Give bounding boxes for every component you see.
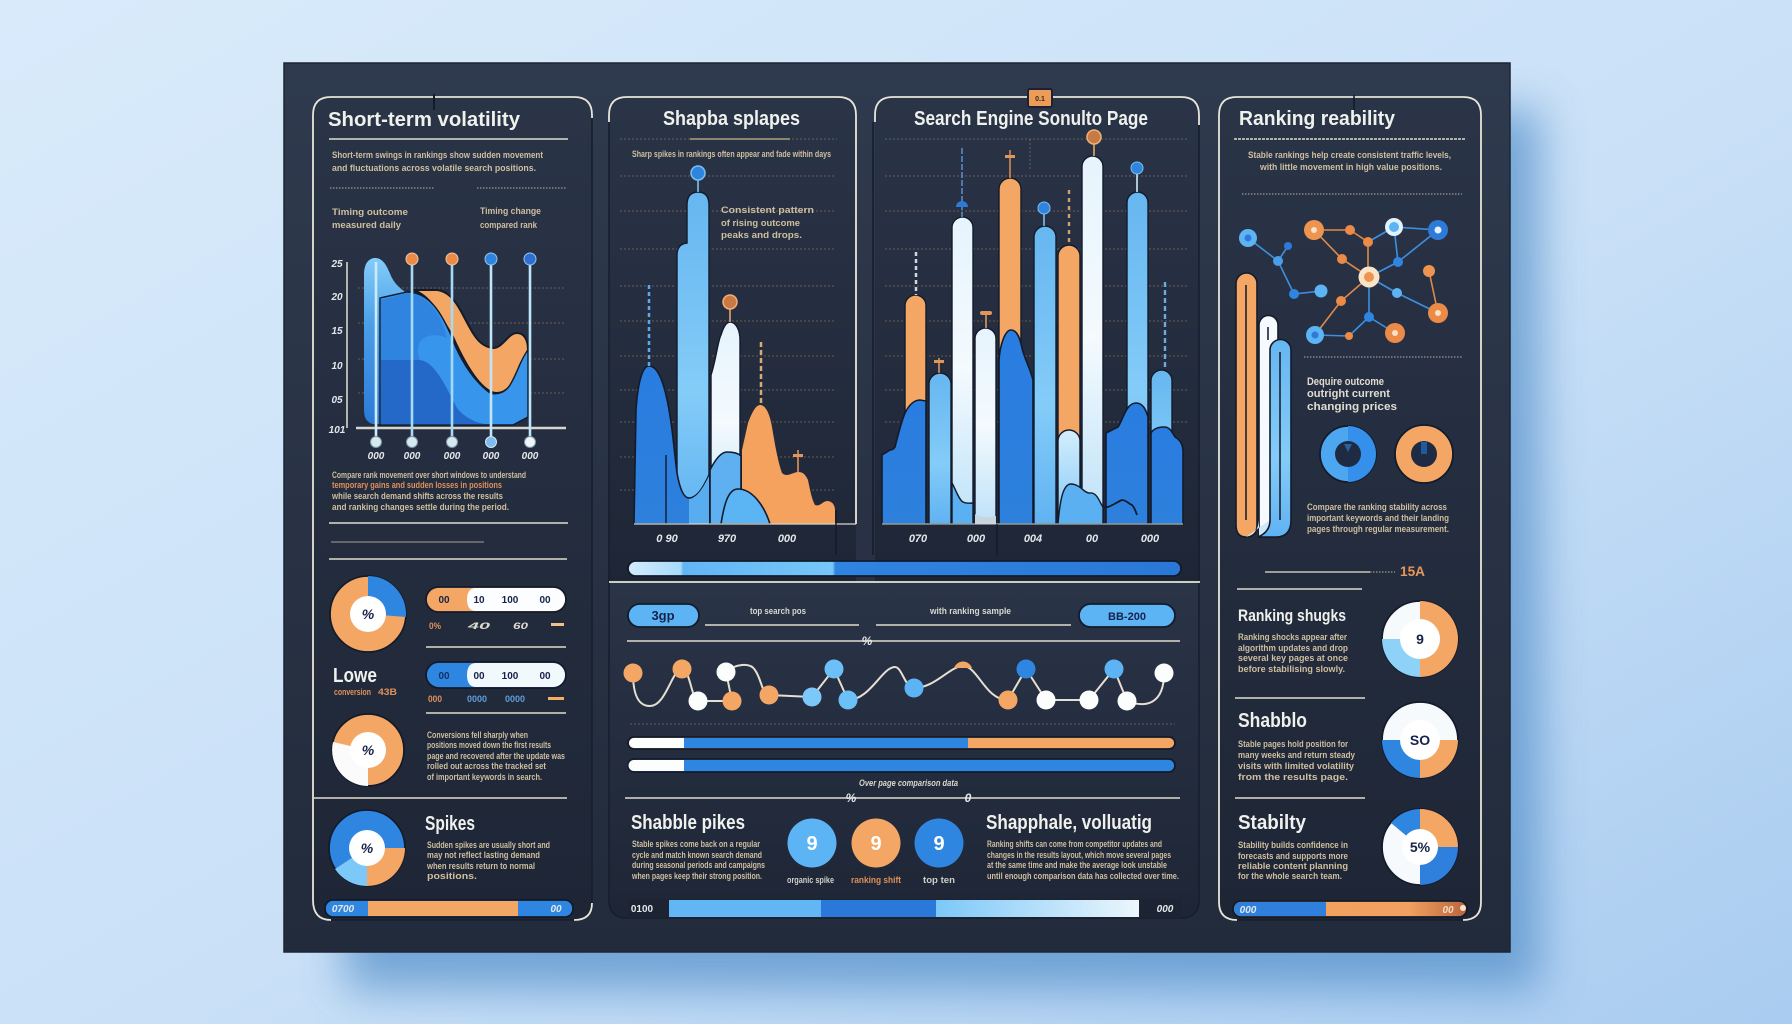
panel: short-term volatility [313,94,592,920]
stat marker: 15A [1400,563,1425,579]
spike chart: 000 [778,533,797,545]
donut: orange and blue: % [362,606,375,622]
label: Lowe: 43B [378,687,398,697]
dashboard board [284,63,1510,952]
number circles: 9 [933,833,945,855]
label: Lowe: Lowe [333,665,377,687]
area chart: 15 [331,326,343,337]
panel frame [609,97,856,590]
text: reliable content planning [1238,861,1348,872]
footer bar: 00 [1442,905,1454,916]
heading: Shabblo: Shabblo [1238,710,1307,732]
note text: Dequire outcome [1307,376,1384,388]
area chart: 000 [483,451,500,462]
node line chart [624,660,1174,710]
area chart: 000 [522,451,539,462]
footer bar [1233,901,1467,917]
area chart: 05 [331,395,343,406]
description text [1307,502,1449,535]
panel: sharp spikes chart [609,97,856,590]
number circles: top ten [923,875,955,886]
number circles: ranking shift [851,875,901,885]
text: Stable pages hold position for [1238,739,1348,750]
text left: during seasonal periods and campaigns [632,860,765,871]
top tab [1028,89,1052,107]
text right: at the same time and make the average look unstable [987,860,1167,871]
pill scale: blue: 00 [539,671,551,682]
horizontal gradient bar [628,561,1181,576]
text block: positions moved down the first results [427,740,551,751]
number circles: 9 [870,833,882,855]
text: many weeks and return steady [1238,750,1356,761]
pill scale: orange [426,587,566,632]
text block: rolled out across the tracked set [427,761,547,772]
panel: ranking stability [1219,95,1481,920]
network diagram [1239,218,1448,344]
area chart: 20 [330,292,343,303]
grid lines [620,176,835,490]
spikes text: when results return to normal [426,861,535,872]
donut: white blue orange: SO [1410,732,1430,748]
heading: Shapphale, volluatig: Shapphale, volluatig [986,812,1152,834]
intro text [332,150,544,174]
label: Lowe [333,665,398,697]
intro text: Stable rankings help create consistent traffic levels, [1248,150,1451,161]
spikes text [426,840,550,882]
number circles [787,818,964,886]
text left: cycle and match known search demand [632,850,762,861]
pill scale: orange: 100 [502,595,519,606]
pill scale: blue: 00 [438,671,450,682]
bar chart: 00 [1086,533,1099,545]
footer bar [628,899,1181,918]
pill scale: orange: 00 [438,595,450,606]
intro text: with little movement in high value positions. [1259,162,1442,173]
sub notes: Timing outcome [332,207,408,218]
panel frame [313,94,592,920]
sub notes: measured daily [332,220,402,231]
bar chart: 000 [967,533,986,545]
label: Lowe: conversion [334,687,371,697]
heading: Shabble pikes: Shabble pikes [631,812,745,834]
note text [1307,376,1397,413]
footer bar [325,900,573,917]
title: Shapba splapes [663,108,800,130]
text: Ranking shocks appear after [1238,632,1347,643]
note text: changing prices [1307,401,1397,413]
area chart: 10 [331,361,343,372]
divider icon: % [862,634,873,648]
chart description: temporary gains and sudden losses in positions [332,480,502,490]
bar chart: 070 [909,533,928,545]
label: Spikes: Spikes [425,813,475,835]
pill scale: blue: 0000 [505,694,525,705]
heading: Stabilty: Stabilty [1238,812,1307,834]
legend pills: BB-200 [1108,611,1146,623]
donut: blue spikes: % [361,840,374,856]
title: Search Engine Sonulto Page [914,108,1148,130]
spike chart [634,166,856,545]
progress bars [628,737,1175,772]
donut: white orange light blue [1382,601,1458,677]
text: algorithm updates and drop [1238,643,1348,654]
legend pills [628,604,1175,627]
text: from the results page. [1238,772,1348,783]
pill scale: orange: 40 [466,621,491,632]
area chart: 000 [368,451,385,462]
text right: until enough comparison data has collected over time. [987,871,1179,882]
description text: important keywords and their landing [1307,513,1449,524]
donut: mixed: 5% [1410,839,1431,855]
area chart: 000 [444,451,461,462]
donut: orange and white: % [362,742,375,758]
sub notes: Timing change [480,206,541,217]
number circles: 9 [806,833,818,855]
text block [427,730,565,783]
footer bar: 00 [550,904,562,915]
panel frame [1219,95,1481,920]
footer bar: 0700 [332,904,355,915]
text right [987,839,1179,882]
donut: mixed [1382,809,1458,885]
number circles: organic spike [787,875,834,886]
bar chart: 000 [1141,533,1160,545]
panel frame [875,97,1199,590]
intro text [1248,150,1451,173]
title: Ranking reability [1239,108,1396,130]
spike chart: 970 [718,533,737,545]
bar chart: 004 [1024,533,1042,545]
donut: orange and blue [330,576,406,652]
text block: page and recovered after the update was [427,751,565,762]
footer bar: 000 [1157,904,1174,915]
caption: Over page comparison data [859,778,958,789]
area chart: 25 [330,259,343,270]
chart description: and ranking changes settle during the period. [332,502,509,513]
divider icons: % [846,791,857,805]
text right: changes in the results layout, which move several pages [987,850,1171,861]
pill scale: blue: 000 [428,694,442,704]
board shadow [345,110,1540,990]
intro text: Short-term swings in rankings show sudden movement [332,150,544,161]
tall rounded bars [1236,273,1291,537]
side note [721,205,814,241]
pill scale: orange: 10 [473,595,485,606]
text right: Ranking shifts can come from competitor updates and [987,839,1162,850]
bar chart [882,130,1183,545]
panel frame [609,582,1199,918]
spikes text: may not reflect lasting demand [427,850,540,861]
sub notes [332,206,541,231]
spike chart: 0 90 [656,533,679,545]
text [1238,739,1356,783]
area chart: 000 [404,451,421,462]
pill scale: blue: 100 [502,671,519,682]
pill scale: orange: 60 [513,621,529,632]
text left: when pages keep their strong position. [631,871,762,882]
heading: Ranking shugks: Ranking shugks [1238,606,1346,625]
text [1238,840,1348,882]
chart description [331,470,526,513]
side note: Consistent pattern [721,205,814,216]
pill scale: blue: 00 [473,671,485,682]
title: Short-term volatility [328,109,521,131]
note text: outright current [1307,388,1390,400]
ring charts [1320,425,1453,483]
side note: of rising outcome [721,218,800,229]
grid lines [885,139,1187,422]
area chart: 101 [329,425,346,436]
donut: white orange light blue: 9 [1416,631,1424,647]
panel: search engine results page [836,89,1199,590]
footer bar: 0100 [631,904,654,915]
caption: Sharp spikes in rankings often appear and fade within days [632,149,831,160]
legend pills: with ranking sample [929,606,1011,617]
sub notes: compared rank [480,220,538,231]
pill scale: orange: 00 [539,595,551,606]
pill scale: blue: 0000 [467,694,487,705]
legend pills: top search pos [750,606,806,617]
description text: Compare the ranking stability across [1307,502,1447,513]
donut: orange and white [332,714,404,786]
pill scale: blue [426,662,566,705]
chart description: while search demand shifts across the results [331,491,503,502]
text left: Stable spikes come back on a regular [632,839,760,850]
donut: white blue orange [1382,702,1458,778]
text [1238,632,1348,675]
footer bar: 000 [1240,905,1257,916]
top tab: 0.1 [1035,96,1045,103]
text: Stability builds confidence in [1238,840,1348,851]
text left [631,839,765,882]
side note: peaks and drops. [721,230,802,241]
area chart [329,253,566,462]
legend pills: 3gp [651,608,675,623]
text: before stabilising slowly. [1238,664,1345,675]
panel: lower centre [609,561,1200,918]
text: several key pages at once [1238,653,1348,664]
text: visits with limited volatility [1238,761,1355,772]
divider icons [846,791,972,805]
divider icons: 0 [965,791,972,805]
chart description: Compare rank movement over short windows to understand [332,470,526,481]
spikes text: Sudden spikes are usually short and [427,840,550,851]
text: for the whole search team. [1238,871,1342,882]
text block: Conversions fell sharply when [427,730,528,741]
pill scale: orange: 0% [429,621,441,631]
intro text: and fluctuations across volatile search positions. [332,163,536,174]
text block: of important keywords in search. [427,772,542,783]
text: forecasts and supports more [1238,851,1348,862]
spikes text: positions. [427,871,477,882]
donut: blue spikes [329,810,405,886]
description text: pages through regular measurement. [1307,524,1449,535]
